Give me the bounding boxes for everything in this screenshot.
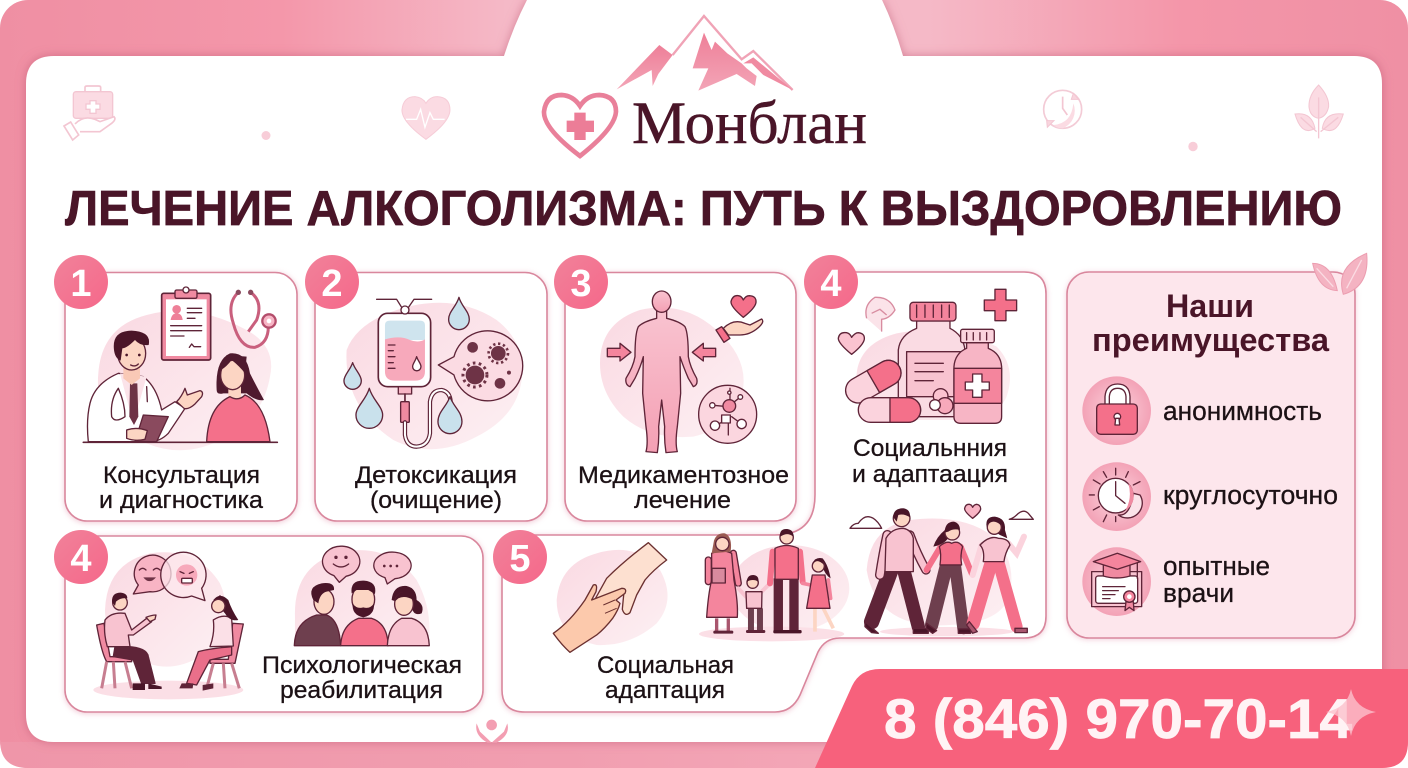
advantages heading: преимущества [1092,322,1329,358]
logo: wordmark: Монблан [632,90,867,156]
illustration: two hands reaching [553,543,668,652]
badge 2: 2 [321,263,343,305]
step 1 label [99,462,264,514]
logo: heart with cross [544,95,616,156]
step 3 label: лечение [634,487,731,514]
icon: clock with sun and moon [1082,462,1151,531]
step 2 label [355,462,517,514]
logo: mountains [617,16,793,91]
decorative dot right [1188,142,1198,151]
step 3 label [578,462,789,514]
advantage: experienced doctors: опытные [1163,551,1270,581]
panel: advantages [1067,253,1367,638]
illustration: three people walking [850,504,1033,636]
step 5 label [597,652,734,704]
title: ЛЕЧЕНИЕ АЛКОГОЛИЗМА: ПУТЬ К ВЫЗДОРОВЛЕНИЮ [65,182,1342,236]
illustration: IV drip and virus [344,297,523,449]
badge 3 [554,255,608,309]
advantage: round the clock [1082,462,1338,531]
illustration: medicine bottles and pills [838,289,1017,423]
decorative dot left [262,131,270,140]
icon: sparkle [1326,689,1376,736]
rehabilitation label: реабилитация [280,677,443,704]
step 4 label: Социальнния [853,435,1007,462]
advantage: anonymity [1082,376,1322,445]
badge 1 [54,255,108,309]
panel: psychological rehabilitation [54,530,483,712]
phone banner [815,669,1408,768]
badge 1: 1 [70,263,92,305]
badge 5 [493,530,547,584]
icon: hands with figure [476,720,508,743]
illustration: body and molecule [600,291,763,453]
step 4 label [852,435,1008,488]
icon: clock with arrows [1044,90,1082,128]
panel: step 2 detox [305,255,547,521]
icon: leaves [1295,85,1343,138]
badge 2 [305,255,359,309]
step 5 label: Социальная [597,652,734,679]
advantage: round the clock: круглосуточно [1163,480,1338,510]
step 2 label: Детоксикация [355,462,517,489]
badge 3: 3 [570,263,592,305]
rehabilitation label [262,652,462,704]
phone number: 8 (846) 970-70-14 [884,687,1352,750]
icon: graduation cap and diploma [1082,547,1151,616]
icon: corner leaves [1313,253,1367,294]
illustration: family of four [699,529,849,641]
logo [544,16,867,156]
icon: medical kit on hand [64,86,115,140]
badge 4 [804,255,858,309]
advantage: experienced doctors: врачи [1163,578,1234,608]
badge 4: 4 [820,263,842,305]
step 4 label: и адаптаация [852,461,1008,488]
badge 5: 5 [509,538,531,580]
step 5 label: адаптация [605,677,725,704]
step 2 label: (очищение) [370,487,502,514]
panel: steps 4 and 5 shared frame [502,272,1046,712]
advantage: experienced doctors [1082,547,1270,616]
icon: lock [1082,376,1151,445]
panel: step 3 medication [554,255,796,521]
step 1 label: и диагностика [99,487,264,514]
panel: step 1 consultation [54,255,297,521]
badge 4 lower [54,530,108,584]
rehabilitation label: Психологическая [262,652,462,679]
advantages heading [1092,288,1329,358]
advantage: anonymity: анонимность [1163,396,1322,426]
step 3 label: Медикаментозное [578,462,789,489]
step 1 label: Консультация [103,462,260,489]
illustration: support group [294,546,429,646]
advantages heading: Наши [1166,288,1254,324]
icon: heart with pulse [402,97,450,139]
badge 4 lower: 4 [70,538,92,580]
illustration: doctor and patient [83,287,277,450]
illustration: therapy conversation [93,552,243,699]
